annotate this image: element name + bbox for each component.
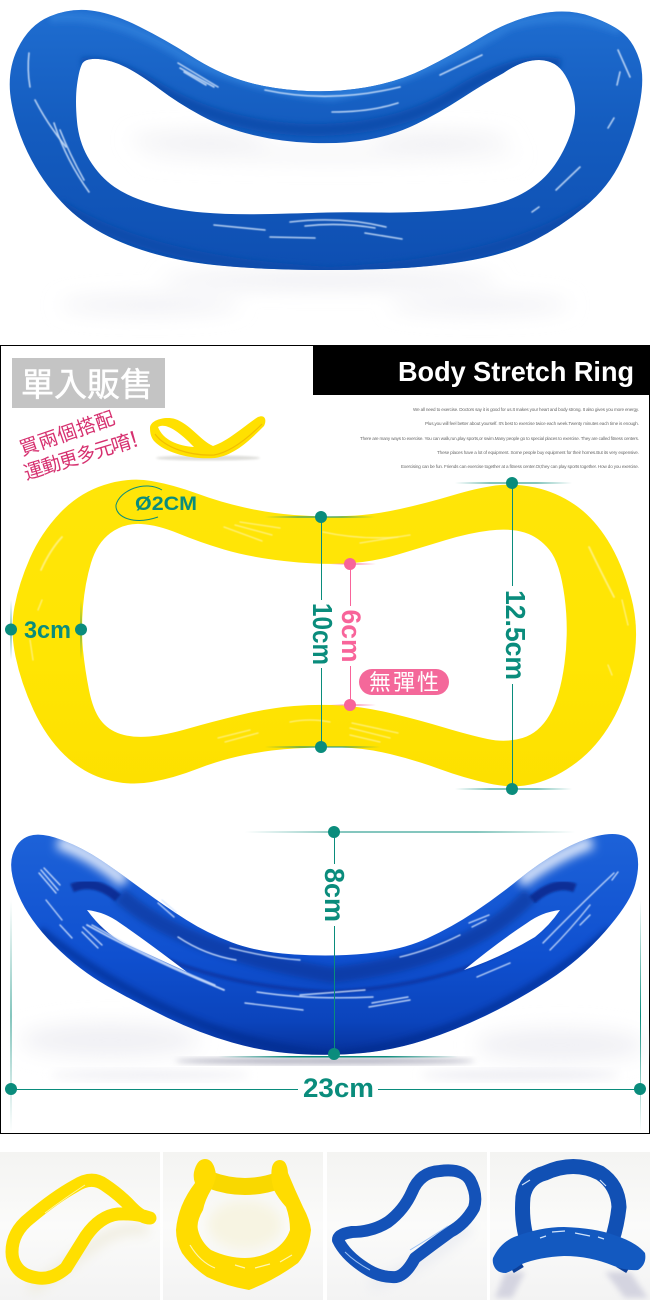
dimension: centre height 10cm: [265, 511, 380, 753]
photo: yellow ring front view: [163, 1152, 323, 1300]
ring highlights: [28, 50, 630, 239]
yellow ring top view: [12, 480, 636, 786]
dimension: arc height 8cm: [218, 826, 575, 1060]
photo: yellow ring angled view: [0, 1152, 160, 1300]
text block: exercise description: Exercising can be fun. Friends can exercise together at a fitness center.Or,they can play sports together. How do you exercise.: [401, 464, 639, 469]
photo: blue ring hero: [10, 10, 642, 313]
dimension: ring diameter 2cm: Ø2CM: [135, 494, 197, 515]
ring shading: [50, 17, 620, 272]
title banner: Body Stretch Ring: [313, 346, 650, 395]
side ring floor shadow: [20, 1024, 645, 1080]
text block: exercise description: These places have a lot of equipment. Some people buy equipment for their homes.But its very expensive.: [437, 450, 639, 455]
blue ring body: [10, 10, 642, 270]
dimension: tube width 3cm: [5, 600, 87, 660]
dimension: tube width 3cm: 3cm: [24, 617, 71, 644]
side ring shading: [40, 842, 610, 1055]
side ring body: [11, 834, 638, 1055]
white slits through the ring: [87, 910, 187, 972]
text block: exercise description: There are many ways to exercise. You can walk,run,play sports,or swim.Many people go to special places to exercise. They are called fitness centers.: [360, 436, 639, 441]
photo: blue ring upright view: [490, 1152, 650, 1300]
title banner: Body Stretch Ring: Body Stretch Ring: [398, 356, 634, 387]
dimension: arc height 8cm: 8cm: [319, 868, 350, 922]
side ring highlights: [39, 868, 618, 1010]
handwritten note: buy two: 買兩個搭配: [16, 407, 118, 459]
handwritten note: buy two: 運動更多元唷!: [21, 428, 142, 483]
handwritten note: buy two: [16, 407, 142, 483]
panel: product diagram frame: [0, 346, 650, 1134]
dimension: end height 12.5cm: [455, 477, 572, 795]
blue ring side view: [11, 834, 645, 1080]
badge: no elasticity: 無彈性: [369, 665, 439, 697]
dimension: end height 12.5cm: 12.5cm: [500, 590, 531, 680]
photo: small twisted yellow ring: [150, 416, 265, 460]
dimension: total width 23cm: 23cm: [303, 1073, 374, 1103]
dimension: inner height 6cm: 6cm: [336, 610, 366, 662]
dimension: ring diameter 2cm: [116, 486, 197, 520]
yellow ring body: [12, 480, 636, 786]
dimension: total width 23cm: [5, 900, 646, 1132]
pale fading top faces: [58, 842, 592, 882]
text block: exercise description: [360, 407, 639, 469]
photo: blue ring angled view: [327, 1152, 487, 1300]
text block: exercise description: Plus,you will feel better about yourself. It's best to exercise twice each week.Twenty minutes each time is enough.: [425, 421, 639, 426]
ring shadow on floor: [60, 134, 570, 313]
dimension: centre height 10cm: 10cm: [307, 603, 338, 665]
tube separation band: [100, 925, 545, 992]
text block: exercise description: We all need to exercise. Doctors say it is good for us.It makes your heart and body strong. It also gives you more energy.: [413, 407, 639, 412]
dark inner rim: [72, 885, 575, 900]
badge: sold individually: 單入販售: [21, 358, 153, 406]
dimension: inner height 6cm: [330, 558, 376, 711]
yellow ring highlights: [30, 522, 628, 742]
